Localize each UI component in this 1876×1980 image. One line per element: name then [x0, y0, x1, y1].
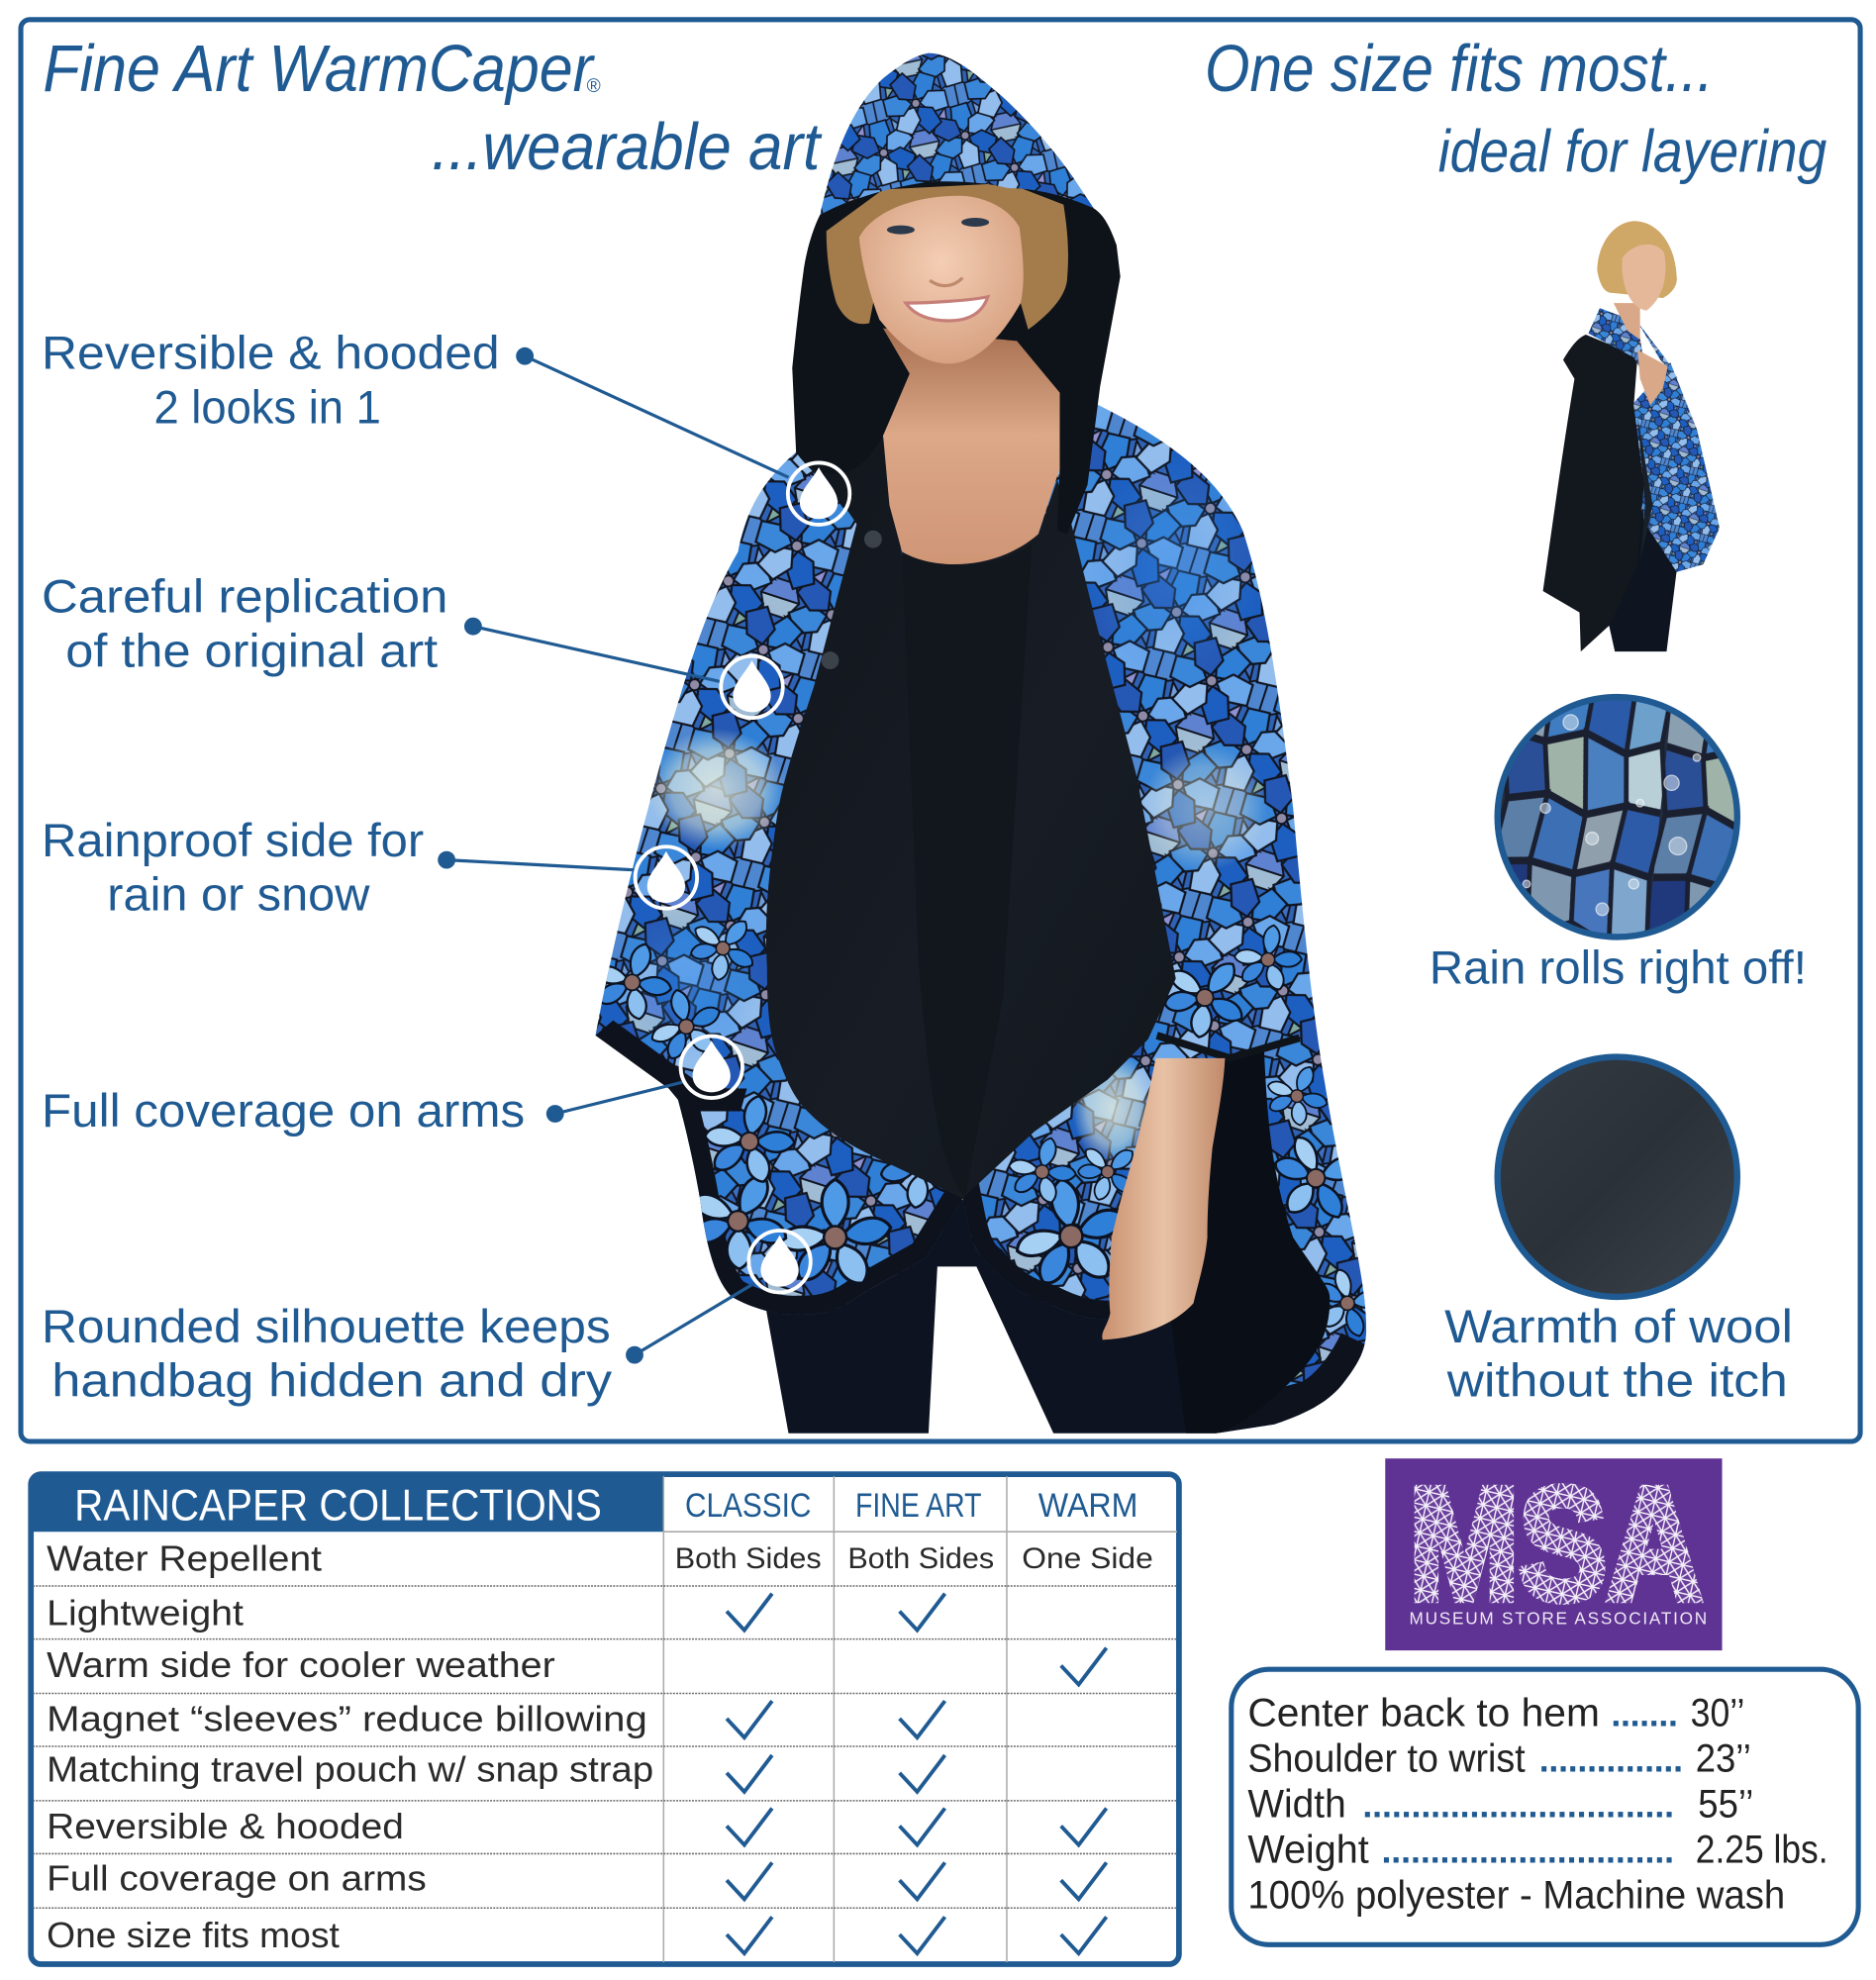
subtitle: wearable art: ...wearable art: [432, 111, 823, 184]
right sleeve hem: [1157, 1036, 1300, 1058]
panel: product frame: [21, 20, 1860, 1441]
table header title: RAINCAPER COLLECTIONS: [74, 1482, 602, 1531]
column headers: [685, 1487, 1137, 1525]
spec: width: 55’’: [1698, 1782, 1753, 1826]
spec: weight: 2.25 lbs.: [1696, 1828, 1828, 1871]
water repellent values: [675, 1542, 1153, 1575]
pants: [764, 1200, 1217, 1434]
face: [1622, 245, 1665, 311]
black cape: [1543, 335, 1644, 651]
hair: [827, 183, 1068, 330]
spec: width: [1247, 1782, 1753, 1826]
callout text: Careful replication: [42, 570, 447, 623]
title: One size fits most: One size fits most...: [1205, 33, 1714, 106]
water repellent values: One Side: [1022, 1542, 1153, 1575]
photo: side view of woman in cape: [1543, 221, 1720, 651]
row labels: Warm side for cooler weather: [47, 1645, 555, 1685]
printed hood: [820, 53, 1094, 215]
cape hem band: [677, 1099, 1111, 1320]
inner sleeve edge: [1637, 417, 1652, 562]
black hood interior: [792, 164, 1121, 535]
chest and neck: [883, 329, 1059, 564]
face: [859, 196, 1024, 363]
caption: Warmth of wool: [1444, 1300, 1793, 1407]
coat buttons: [822, 531, 882, 669]
right arm and hand: [1102, 1058, 1225, 1339]
spec: width: Width: [1247, 1782, 1346, 1826]
hem flowers: [585, 900, 1389, 1342]
callout: Rainproof side: rain or snow: [107, 868, 370, 921]
row labels: Magnet “sleeves” reduce billowing: [47, 1700, 647, 1739]
column headers: FINE ART: [855, 1487, 981, 1525]
logo: Museum Store Association: [1385, 1456, 1723, 1650]
printed cape body: [580, 379, 1389, 1452]
nose: [930, 278, 962, 286]
printed inner sleeve: [1633, 362, 1720, 572]
spec: weight: [1247, 1828, 1828, 1871]
black top: [902, 543, 1032, 1197]
caption: Rain rolls right off: Rain rolls right off!: [1430, 941, 1807, 994]
smile: [906, 297, 988, 321]
caption: Warmth of wool: Warmth of wool: [1444, 1300, 1793, 1352]
callout: Rounded silhouette: [42, 1231, 811, 1407]
spec: center back: Center back to hem: [1247, 1692, 1600, 1735]
callout: Careful replication: [42, 570, 783, 718]
water repellent values: Both Sides: [675, 1542, 822, 1575]
spec: shoulder to wrist: 23’’: [1696, 1737, 1751, 1781]
row labels: Lightweight: [47, 1594, 244, 1634]
logo caption: MUSEUM STORE ASSOCIATION: [1409, 1608, 1707, 1628]
spec: center back: [1247, 1692, 1744, 1735]
left sleeve hem: [596, 1021, 746, 1111]
column headers: WARM: [1038, 1487, 1137, 1525]
callout text: Rainproof side for: [42, 814, 424, 866]
spec: weight: ..............................: [1381, 1831, 1674, 1870]
callout: Rainproof side: [42, 814, 697, 921]
row labels: [47, 1539, 653, 1955]
eyes: [887, 218, 989, 235]
table: RainCaper collections: [31, 1474, 1179, 1964]
callout: Careful replication: of the original art: [65, 624, 438, 676]
subtitle: ideal for layering: ideal for layering: [1438, 118, 1827, 184]
spec: center back: .......: [1611, 1695, 1678, 1734]
callout text: Full coverage on arms: [42, 1084, 525, 1137]
spec: shoulder to wrist: [1247, 1737, 1751, 1781]
callout: Full coverage on arms: [42, 1037, 742, 1137]
logo letters: MSA: [1409, 1456, 1702, 1634]
black reversible lining panel: [766, 436, 1176, 1198]
row labels: Full coverage on arms: [47, 1858, 427, 1898]
swatch image: [1501, 700, 1734, 935]
spec: shoulder to wrist: Shoulder to wrist: [1247, 1737, 1526, 1781]
table header band: [33, 1476, 663, 1532]
row labels: One size fits most: [47, 1916, 340, 1955]
water repellent values: Both Sides: [847, 1542, 994, 1575]
row labels: Water Repellent: [47, 1539, 322, 1579]
printed collar right: [1637, 322, 1678, 379]
spec: fabric: 100% polyester - Machine wash: [1247, 1873, 1785, 1917]
legs: [1605, 505, 1677, 651]
panel: size specifications: [1232, 1669, 1858, 1944]
printed collar: [1588, 308, 1646, 379]
row labels: Matching travel pouch w/ snap strap: [47, 1750, 653, 1790]
spec: width: ................................: [1362, 1785, 1674, 1825]
spec: center back: 30’’: [1691, 1692, 1744, 1735]
blonde hair: [1597, 221, 1677, 298]
photo: woman wearing reversible cape: [580, 53, 1389, 1452]
neck and hand: [1614, 303, 1668, 405]
spec: shoulder to wrist: ...............: [1539, 1740, 1683, 1780]
callout text: Rounded silhouette keeps: [42, 1300, 611, 1352]
cape underside and inner shadow: [1167, 1050, 1330, 1434]
callout text: Reversible & hooded: [42, 326, 500, 378]
caption: Warmth of wool: without the itch: [1446, 1354, 1788, 1407]
spec: weight: Weight: [1247, 1828, 1369, 1871]
title: Fine Art WarmCaper: Fine Art WarmCaper: [43, 33, 596, 106]
row labels: Reversible & hooded: [47, 1807, 404, 1846]
registered mark: ®: [587, 76, 601, 97]
table frame: [31, 1474, 1179, 1964]
icon: wool fabric swatch: [1498, 1057, 1737, 1297]
callout: Rounded silhouette: handbag hidden and dry: [51, 1354, 613, 1407]
callout: Reversible & hooded: 2 looks in 1: [153, 380, 381, 433]
column headers: CLASSIC: [685, 1487, 811, 1525]
check marks: [727, 1594, 1107, 1953]
icon: rain fabric swatch: [1489, 688, 1746, 945]
callout: Reversible & hooded: [42, 326, 849, 525]
